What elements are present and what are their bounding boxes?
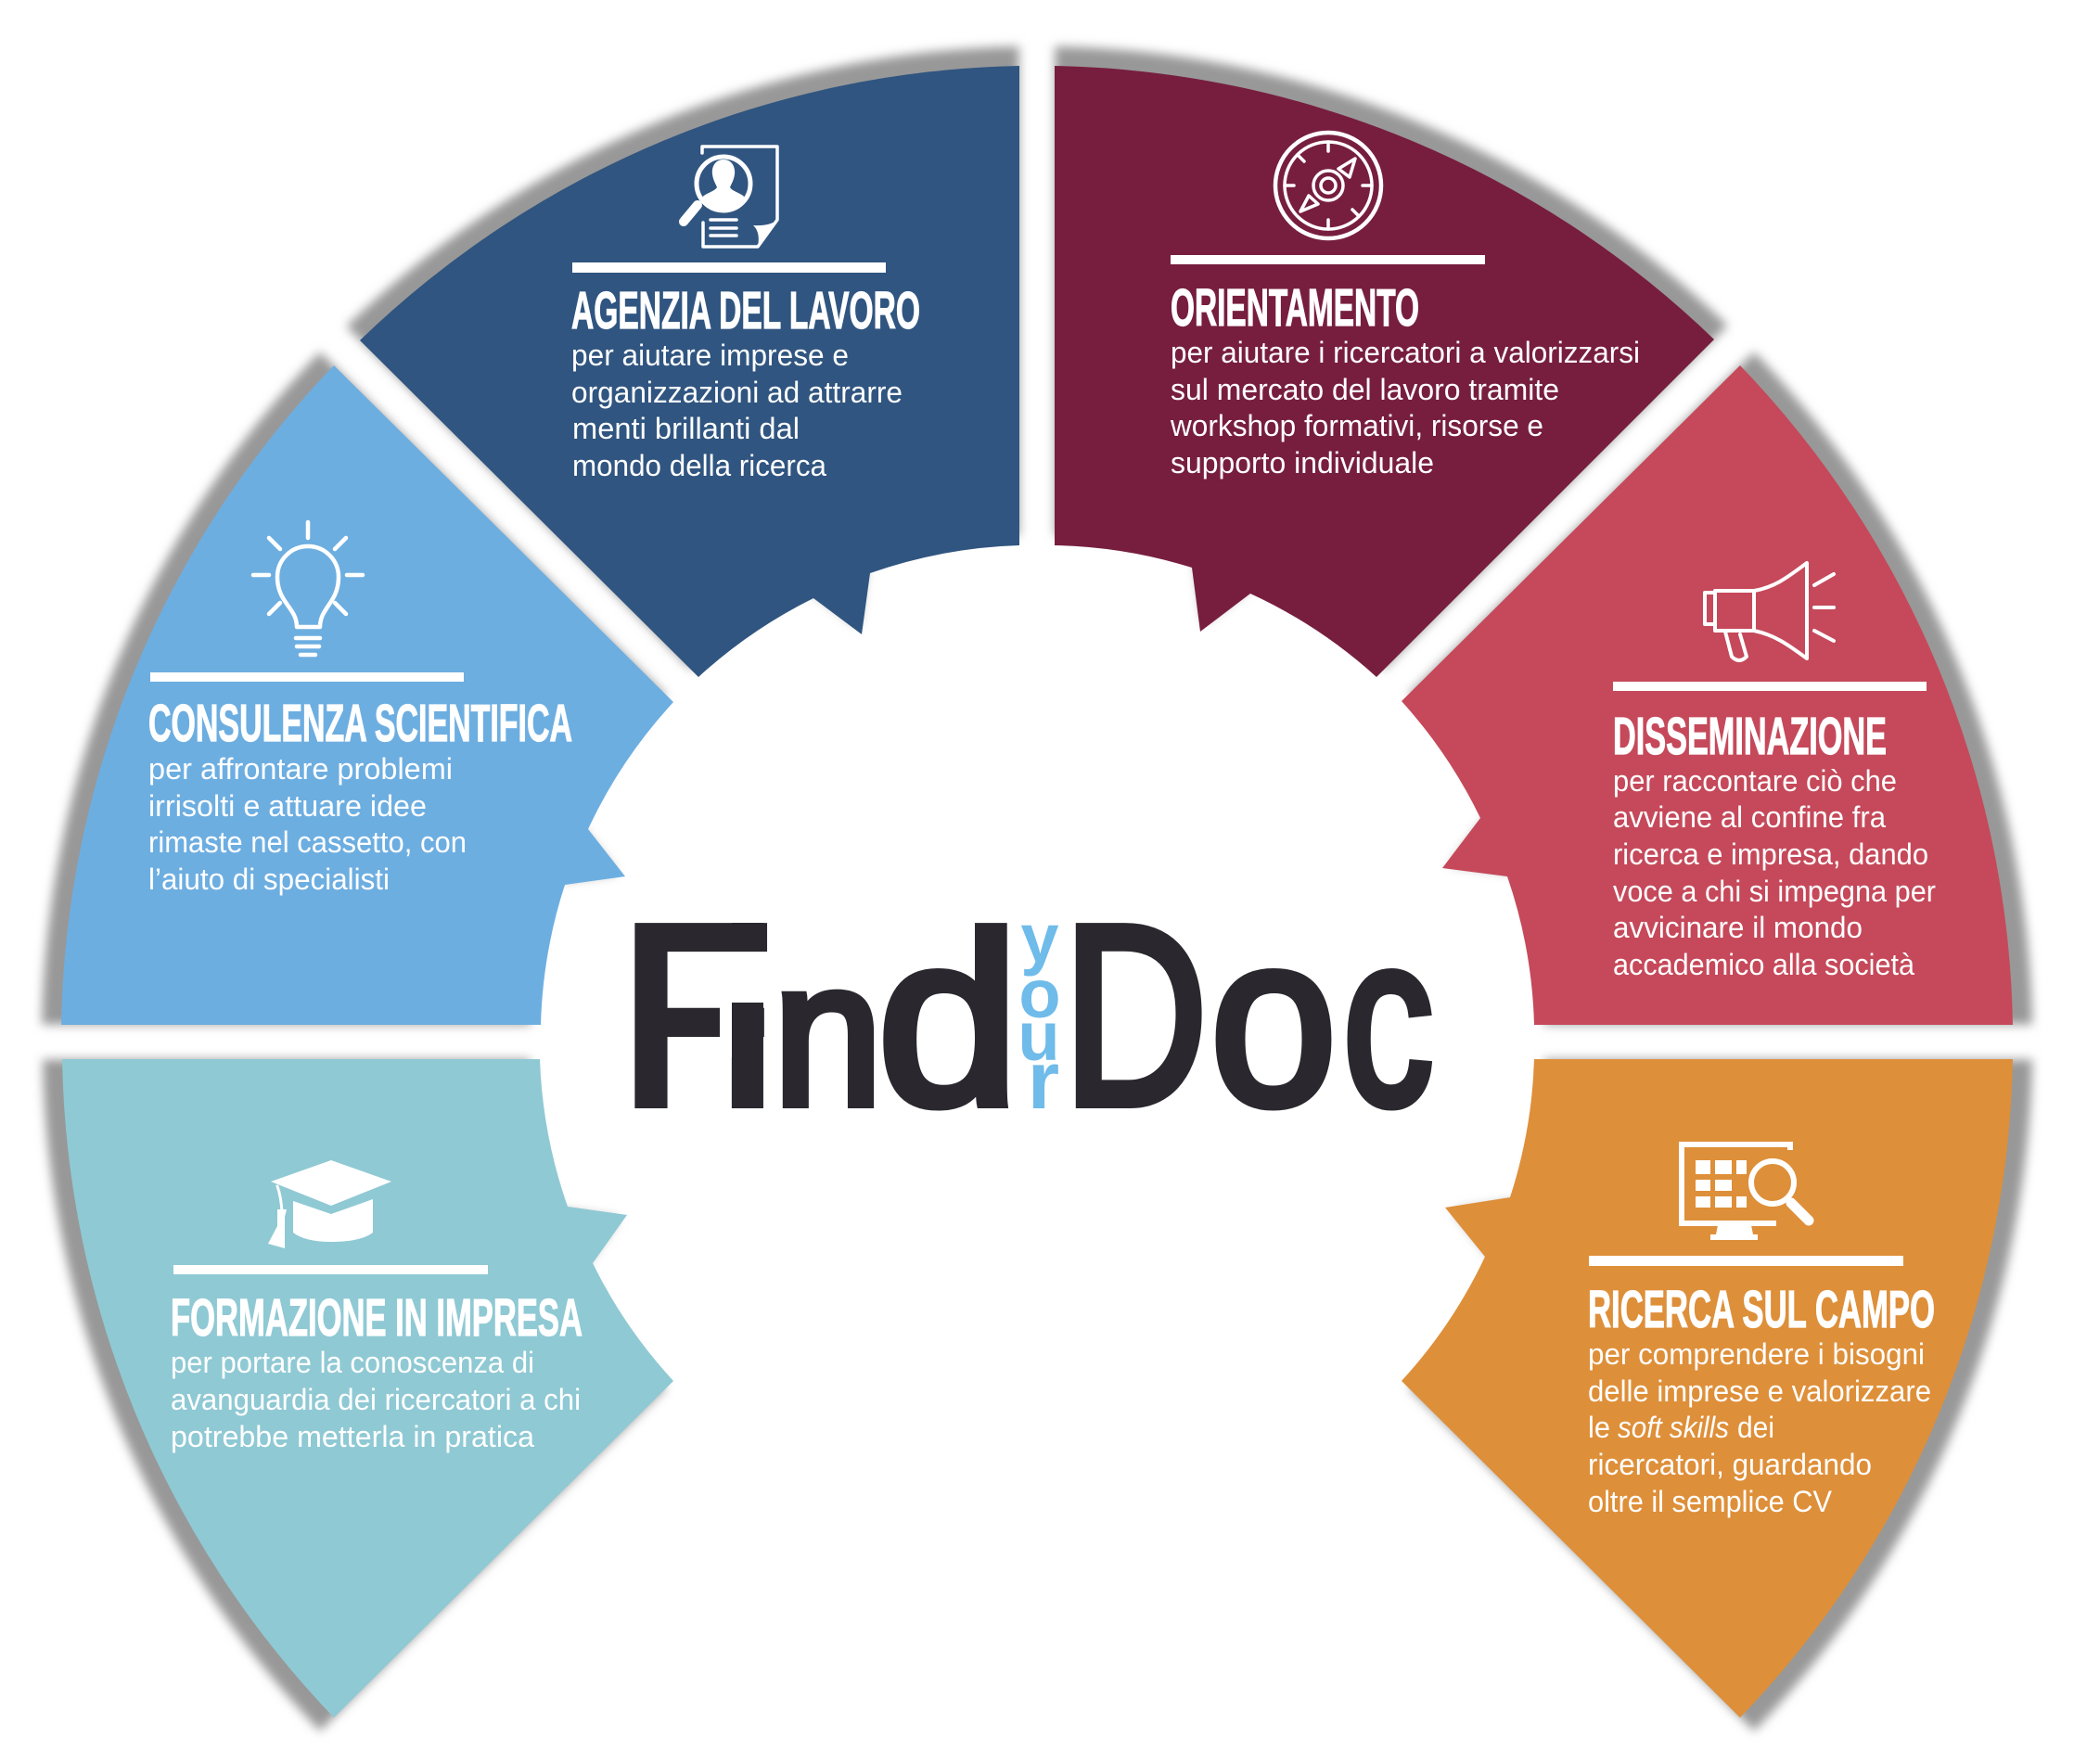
logo word: your: u [1018,998,1060,1075]
description: per comprendere i bisogni [1588,1337,1925,1371]
divider rule [150,672,464,682]
description: ricercatori, guardando [1588,1448,1872,1481]
logo word: your: y [1020,900,1059,977]
description: oltre il semplice CV [1588,1485,1833,1518]
icon: light bulb [253,522,363,655]
logo word: Find: d [877,884,1019,1156]
panel: formazione in impresa [62,1059,673,1718]
description [148,752,467,896]
logo word: your: r [1028,1034,1059,1126]
icon: megaphone [1705,563,1834,660]
logo word: Find: n [774,919,882,1147]
panel shape: crimson sector [1402,365,2013,1025]
description: ricerca e impresa, dando [1613,837,1928,871]
description [1588,1337,1931,1518]
description: l’aiuto di specialisti [148,863,390,896]
heading: AGENZIA DEL LAVORO [571,281,920,340]
description: workshop formativi, risorse e [1170,409,1543,442]
description [571,339,903,482]
description: rimaste nel cassetto, con [148,825,467,859]
description: supporto individuale [1171,446,1434,479]
panel: orientamento [1055,66,1714,677]
description: per aiutare imprese e [571,339,849,372]
icon: compass [1275,133,1381,238]
description: mondo della ricerca [572,449,826,482]
logo: FindYourDoc [619,873,1433,1158]
description: avviene al confine fra [1613,800,1886,834]
description [1613,764,1936,981]
logo word: your: o [1018,955,1061,1032]
panel: ricerca sul campo [1402,1059,2013,1718]
description: organizzazioni ad attrarre [571,376,903,409]
description: dei [1737,1411,1774,1444]
description: accademico alla società [1613,948,1914,981]
heading: FORMAZIONE IN IMPRESA [171,1288,583,1348]
panel shape: maroon sector [1055,66,1714,677]
panel shape: teal sector [62,1059,673,1718]
heading: CONSULENZA SCIENTIFICA [148,694,572,753]
description: per raccontare ciò che [1613,764,1897,798]
description: avvicinare il mondo [1613,911,1863,944]
heading: ORIENTAMENTO [1171,278,1419,338]
description: voce a chi si impegna per [1613,875,1936,908]
panel shape: blue sector [360,66,1019,677]
panel shape: light blue sector [61,365,673,1025]
logo word: Doc: o [1210,884,1337,1156]
icon: magnifier over CV [684,147,777,247]
divider rule [1589,1256,1903,1266]
description: potrebbe metterla in pratica [171,1420,534,1453]
divider rule [1613,682,1927,691]
logo word: Find: F [619,873,773,1158]
logo word: Doc: D [1063,873,1208,1158]
panel: agenzia del lavoro [360,66,1019,677]
description: sul mercato del lavoro tramite [1171,373,1559,406]
description: le [1588,1411,1610,1444]
panel shape: orange sector [1402,1059,2013,1718]
icon: graduation cap [268,1160,391,1248]
logo word: Doc: c [1343,884,1433,1156]
description: irrisolti e attuare idee [148,789,427,823]
logo word: Find [619,873,1019,1158]
heading: DISSEMINAZIONE [1613,707,1887,766]
description: menti brillanti dal [572,412,800,445]
divider rule [572,262,886,273]
description: delle imprese e valorizzare [1588,1374,1931,1408]
divider rule [1171,255,1485,264]
description: avanguardia dei ricercatori a chi [171,1383,581,1416]
description: per portare la conoscenza di [171,1346,534,1379]
description: per aiutare i ricercatori a valorizzarsi [1171,336,1640,369]
description [171,1346,581,1453]
description: soft skills [1618,1411,1729,1444]
description: per affrontare problemi [148,752,453,786]
divider rule [173,1265,488,1274]
icon: monitor with magnifier [1682,1144,1809,1240]
description [1170,336,1640,479]
logo word: Find: i [720,873,775,1158]
panel: consulenza scientifica [61,365,673,1025]
panel: disseminazione [1402,365,2013,1025]
